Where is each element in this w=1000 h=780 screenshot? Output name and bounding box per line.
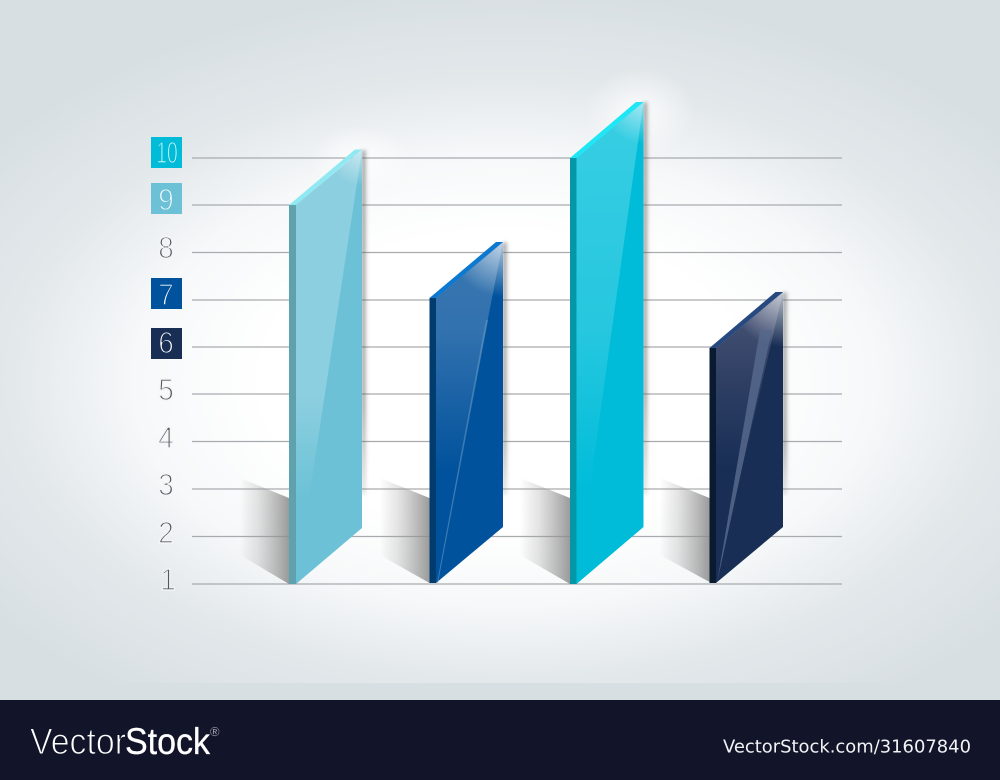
footer logo: ® bbox=[210, 724, 220, 739]
grid lines bbox=[192, 158, 842, 584]
front face bbox=[716, 292, 783, 583]
floor shadow bbox=[240, 478, 289, 584]
footer logo bbox=[30, 721, 220, 762]
gloss bbox=[296, 150, 362, 584]
footer image id: VectorStock.com/31607840 bbox=[723, 736, 971, 758]
axis numbers: 6 bbox=[158, 326, 174, 360]
lower background band bbox=[0, 683, 1000, 700]
legend box 9 bbox=[151, 183, 182, 214]
top highlight bbox=[436, 242, 503, 310]
floor shadow bbox=[660, 478, 710, 582]
top highlight bbox=[576, 102, 644, 170]
legend box 7 bbox=[151, 278, 182, 309]
legend box 6 bbox=[151, 328, 182, 359]
bar 4: value 6 bbox=[660, 292, 789, 583]
bar 1: value 9 bbox=[240, 150, 368, 584]
axis numbers: 10 bbox=[156, 137, 178, 170]
side face bbox=[570, 158, 576, 584]
y-axis scale bbox=[151, 137, 182, 597]
axis numbers: 5 bbox=[158, 373, 174, 407]
axis numbers: 7 bbox=[158, 278, 174, 312]
light sliver bbox=[717, 330, 772, 583]
floor shadow bbox=[520, 478, 570, 584]
axis numbers: 2 bbox=[158, 516, 174, 550]
bar 3: value 10 bbox=[520, 102, 650, 584]
front face bbox=[296, 150, 362, 584]
top highlight bbox=[296, 150, 362, 220]
floor shadow bbox=[380, 478, 430, 583]
axis numbers: 8 bbox=[158, 231, 174, 265]
axis numbers: 1 bbox=[160, 563, 176, 597]
bar 2: value 7 bbox=[380, 242, 509, 583]
axis numbers: 4 bbox=[158, 421, 174, 455]
side face bbox=[430, 298, 436, 583]
axis numbers bbox=[156, 137, 178, 597]
top face bbox=[430, 242, 503, 298]
top face bbox=[289, 150, 362, 205]
right shadow bbox=[783, 292, 789, 495]
front face bbox=[436, 242, 503, 583]
footer logo: Vector bbox=[30, 721, 126, 762]
gloss bbox=[716, 292, 783, 583]
top highlight bbox=[716, 292, 783, 360]
right shadow bbox=[644, 102, 650, 495]
gloss bbox=[436, 242, 503, 583]
axis numbers: 3 bbox=[158, 468, 174, 502]
top face bbox=[570, 102, 644, 158]
legend box 10 bbox=[151, 137, 182, 168]
top face bbox=[710, 292, 783, 348]
side face bbox=[710, 348, 716, 583]
gloss bbox=[576, 102, 644, 584]
glow behind tallest bar bbox=[585, 67, 695, 157]
axis numbers: 9 bbox=[158, 183, 174, 217]
light sliver bbox=[437, 320, 488, 583]
footer logo: Stock bbox=[125, 721, 210, 762]
right shadow bbox=[362, 150, 368, 495]
side face bbox=[289, 205, 296, 584]
footer bar bbox=[0, 700, 1000, 780]
glow behind first bar bbox=[310, 125, 410, 195]
front face bbox=[576, 102, 644, 584]
right shadow bbox=[503, 242, 509, 495]
